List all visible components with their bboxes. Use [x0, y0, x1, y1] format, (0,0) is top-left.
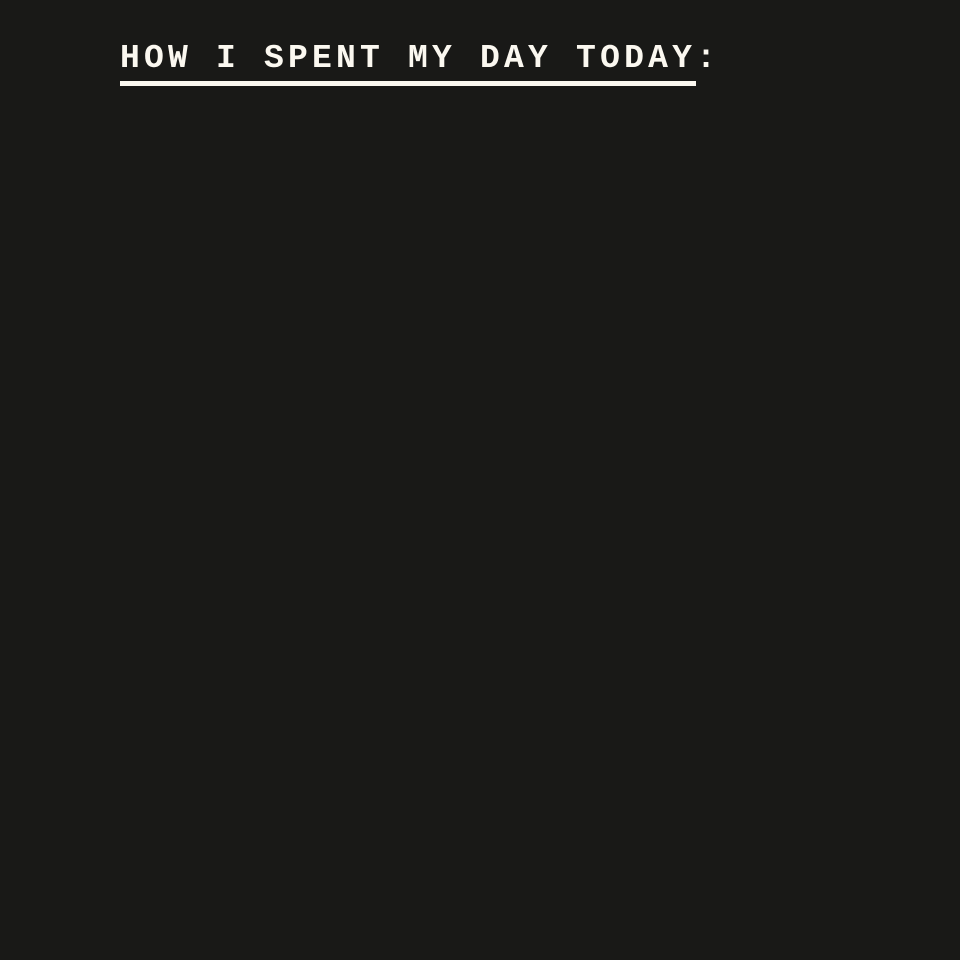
title: HOW I SPENT MY DAY TODAY: — [120, 40, 720, 77]
title underline — [120, 81, 696, 86]
